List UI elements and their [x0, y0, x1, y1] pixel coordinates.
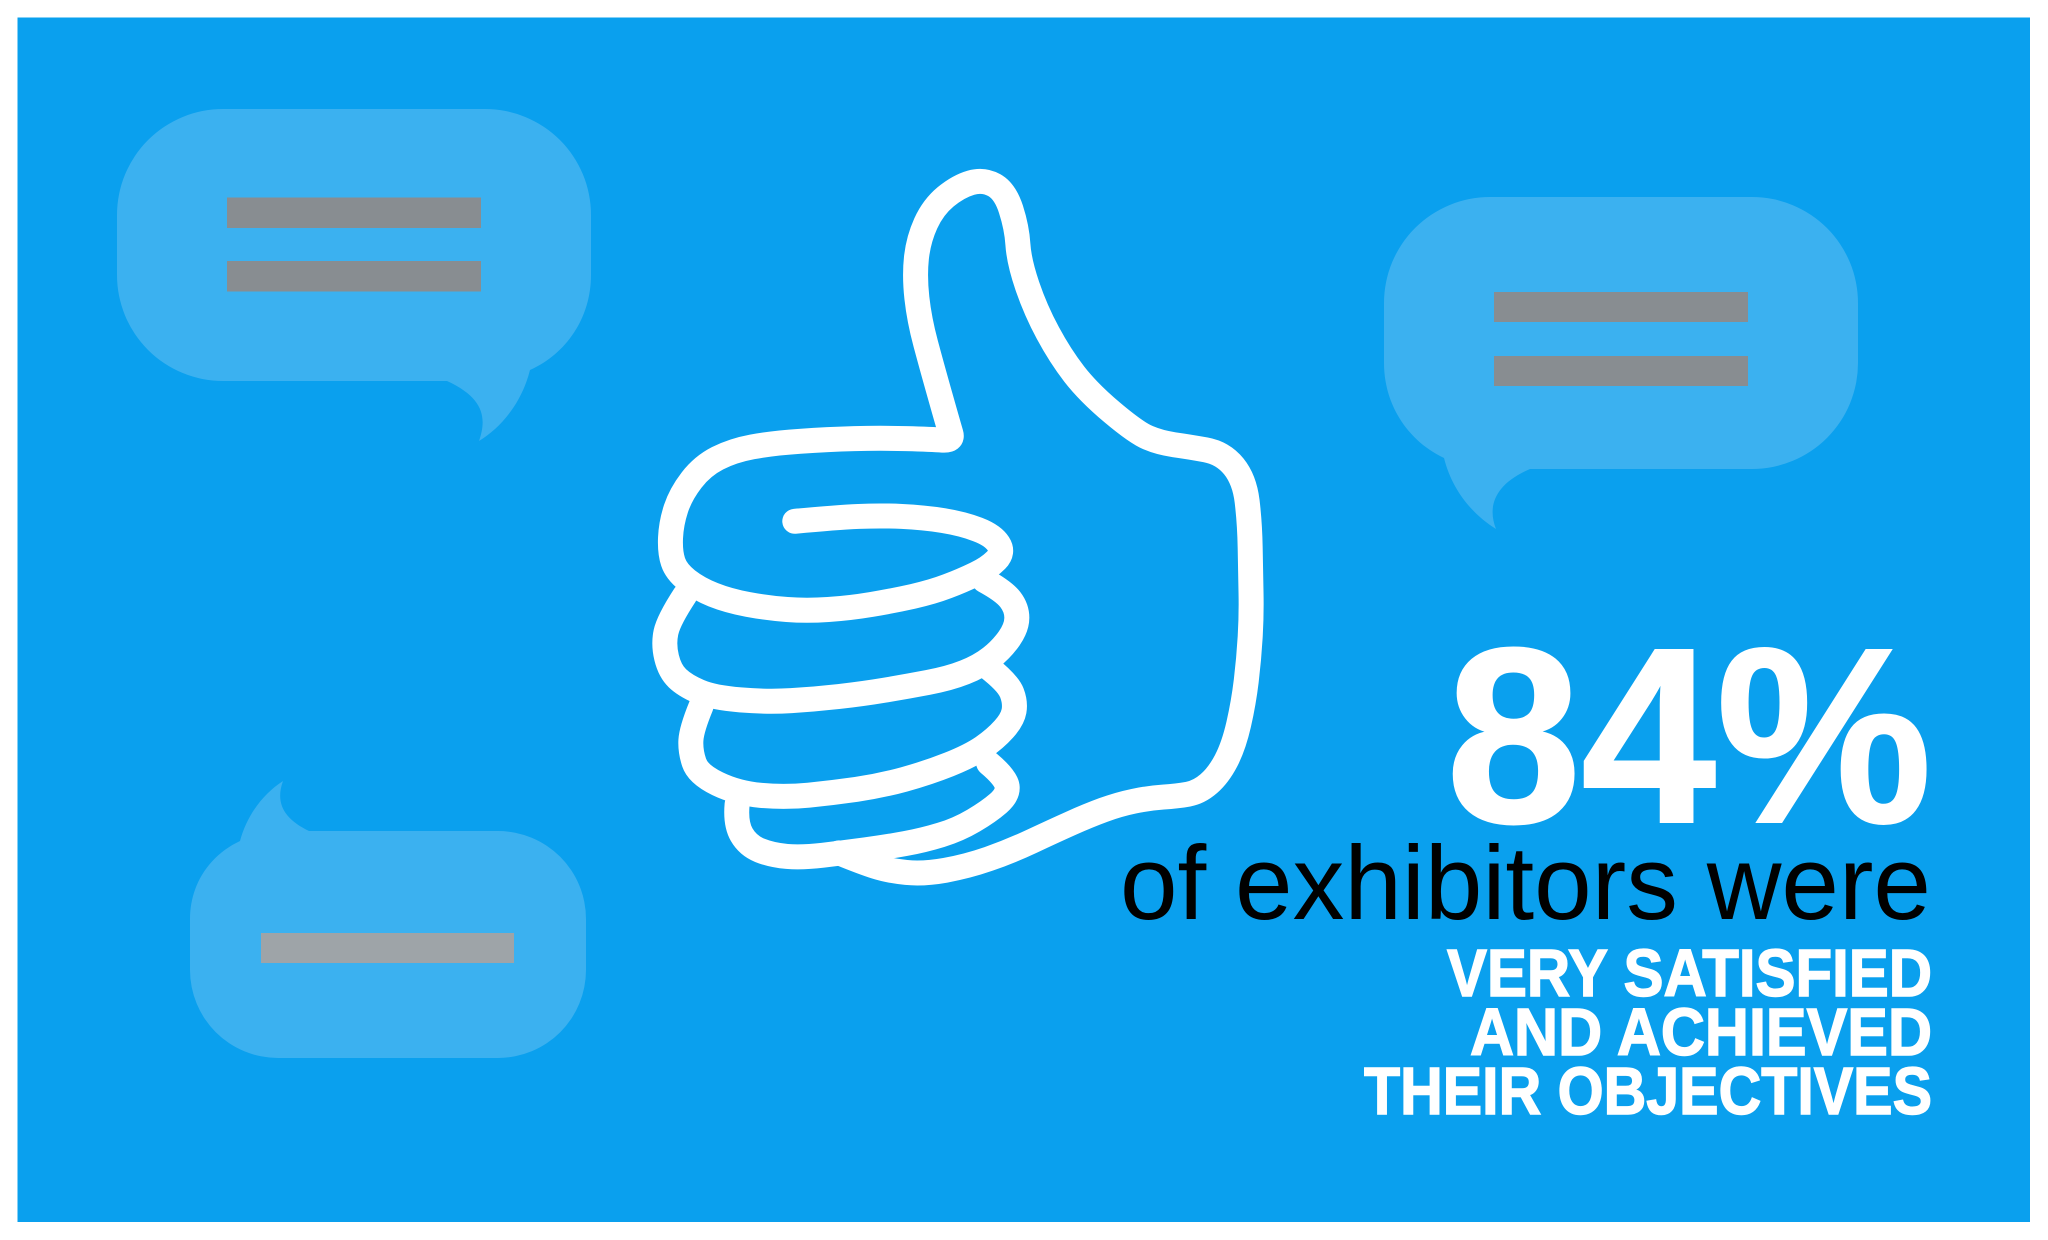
third finger [691, 668, 1014, 796]
text: very satisfied and achieved their objectives: THEIR OBJECTIVES [1364, 1054, 1932, 1129]
icon: thumbs up hand [665, 181, 1251, 873]
bubble shape with tail [1384, 197, 1858, 529]
bubble shape with tail [190, 781, 586, 1058]
second finger [665, 580, 1017, 701]
text line bars [227, 198, 481, 292]
text: very satisfied and achieved their objectives [1364, 936, 1932, 1129]
hand outline with thumb and index finger [670, 181, 1251, 873]
speech bubble: top left [117, 109, 591, 441]
text: very satisfied and achieved their objectives: AND ACHIEVED [1470, 995, 1932, 1070]
text: of exhibitors were: of exhibitors were [1120, 825, 1931, 942]
bubble shape with tail [117, 109, 591, 441]
text line bar [261, 933, 514, 963]
statistic: 84%: 84% [1446, 596, 1932, 875]
text: very satisfied and achieved their objectives: VERY SATISFIED [1447, 936, 1932, 1011]
text line bars [1494, 292, 1748, 386]
speech bubble: bottom left [190, 781, 586, 1058]
speech bubble: top right [1384, 197, 1858, 529]
fourth finger [737, 763, 1007, 857]
